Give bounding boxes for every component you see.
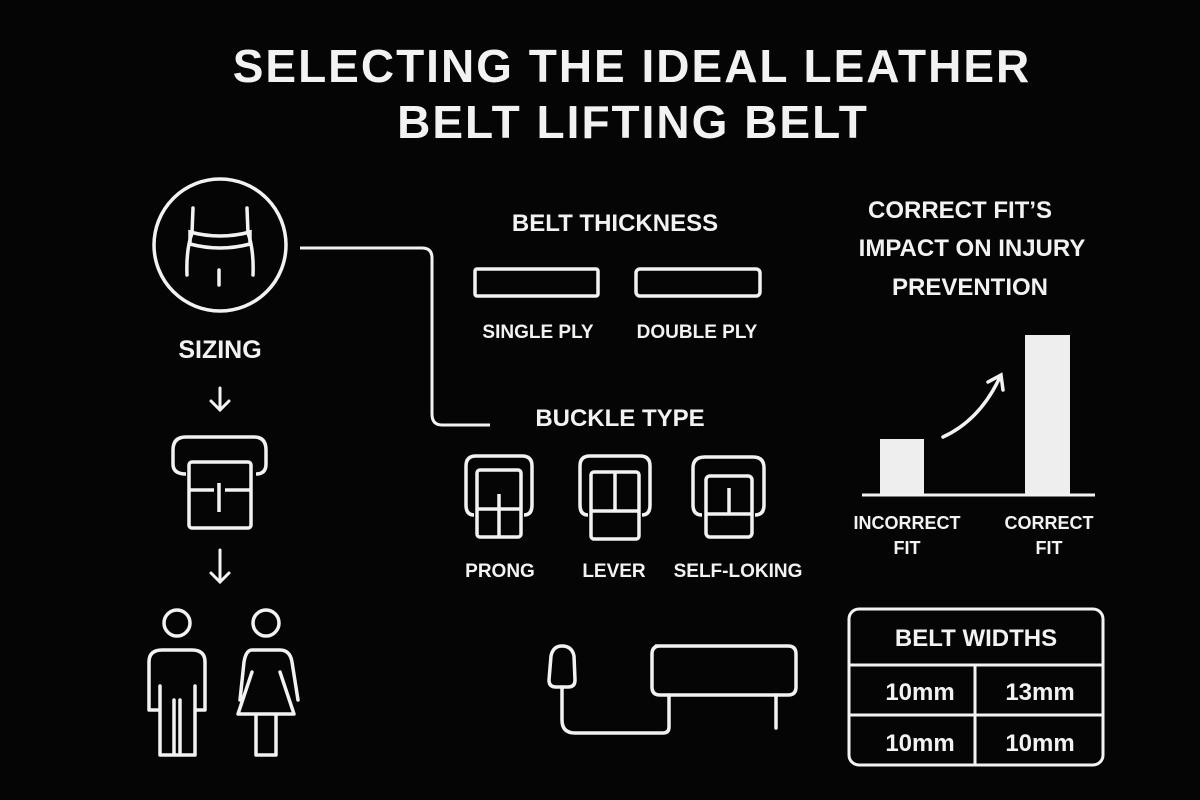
bar chart [854, 335, 1095, 558]
labels: buckle types: LEVER [582, 561, 646, 582]
heading: correct fit impact: PREVENTION [892, 274, 1048, 301]
bar chart: FIT [894, 538, 920, 558]
heading: correct fit impact [859, 197, 1085, 301]
labels: buckle types: SELF-LOKING [674, 561, 802, 582]
heading: buckle type: BUCKLE TYPE [535, 405, 705, 432]
label: single ply: SINGLE PLY [482, 322, 594, 343]
icon: buckle [173, 437, 266, 528]
label: double ply: DOUBLE PLY [637, 322, 758, 343]
title: BELT LIFTING BELT [397, 96, 869, 148]
icon: self-locking buckle [693, 457, 764, 537]
table: belt widths: 10mm [1005, 730, 1075, 757]
labels: buckle types [465, 561, 802, 582]
table: belt widths: 13mm [1005, 679, 1075, 706]
icon: prong buckle [466, 456, 532, 537]
table: belt widths: 10mm [885, 730, 955, 757]
icon: double ply [636, 269, 760, 296]
heading: correct fit impact: CORRECT FIT’S [868, 197, 1052, 224]
arrow down 1 [211, 388, 229, 410]
icon: lever buckle [580, 456, 650, 539]
bar chart: INCORRECT [854, 513, 961, 533]
heading: correct fit impact: IMPACT ON INJURY [859, 235, 1085, 262]
title: SELECTING THE IDEAL LEATHER [233, 40, 1031, 92]
arrow down 2 [211, 550, 229, 582]
icon: woman [238, 610, 298, 755]
connector line [300, 248, 490, 425]
table: belt widths: 10mm [885, 679, 955, 706]
icon: waist circle [154, 179, 286, 311]
icon: belt device [549, 646, 796, 733]
table: belt widths [849, 609, 1103, 765]
bar chart: FIT [1036, 538, 1062, 558]
labels: buckle types: PRONG [465, 561, 535, 582]
icon: single ply [475, 269, 598, 296]
bar chart: CORRECT [1004, 513, 1094, 533]
icon: man [149, 610, 205, 755]
heading: belt thickness: BELT THICKNESS [512, 210, 718, 237]
title [233, 40, 1031, 148]
arrow: improvement [943, 375, 1003, 437]
sizing label: SIZING [178, 336, 262, 364]
table: belt widths: BELT WIDTHS [895, 625, 1057, 652]
